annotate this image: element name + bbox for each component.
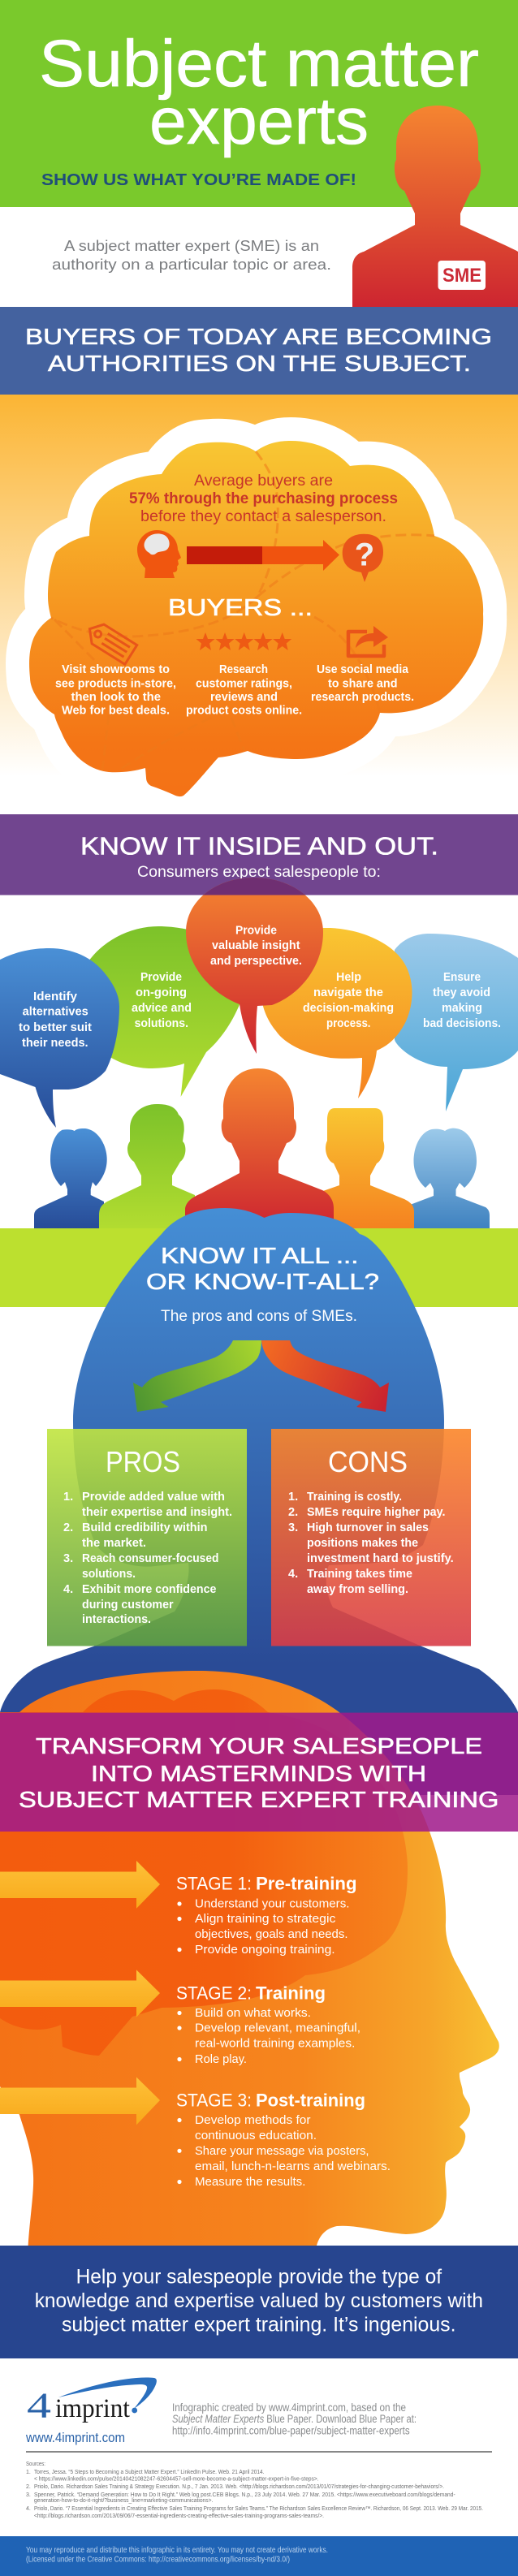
heading: know it all: The pros and cons of SMEs. [161,1308,357,1325]
heading: buyers: AUTHORITIES ON THE SUBJECT. [48,351,471,376]
text: 57 percent statement: Average buyers are [194,472,333,490]
text: stage 2: Develop relevant, meaningful, [195,2022,360,2035]
text: stage 1 [176,1874,357,1957]
list: pros: 4. [63,1583,73,1596]
heading: know it inside and out: Consumers expect salespeople to: [137,864,381,881]
text: stage 3: continuous education. [195,2129,317,2142]
text: sources: 4. [26,2506,31,2512]
text: stage 3: STAGE 3: [176,2090,252,2110]
speech bubble: navigate: Help [336,971,361,984]
text: sources: 1. [26,2470,31,2475]
list: pros [63,1491,232,1626]
text: stage 2: STAGE 2: [176,1983,252,2003]
speech bubble: insight: valuable insight [212,939,300,952]
speech bubble: alternatives: their needs. [22,1037,88,1050]
speech bubble: avoid bad decisions: making [442,1002,482,1015]
list: cons: Training takes time [307,1568,412,1581]
text: sources: 2. [26,2484,31,2490]
heading: transform your salespeople: INTO MASTERMINDS WITH [91,1761,426,1786]
arrow: stage 3 [0,2077,160,2125]
arrow: stage 1 [0,1861,160,1909]
text: showrooms: see products in-store, [55,677,176,690]
speech bubble: avoid bad decisions: Ensure [443,971,481,984]
list: pros: during customer [82,1599,174,1612]
panel: brain [29,441,483,796]
list: pros: Exhibit more confidence [82,1583,216,1596]
text: research: product costs online. [186,705,302,718]
text: stage 3: email, lunch-n-learns and webinars. [195,2160,391,2173]
text: showrooms: then look to the [71,691,161,704]
text: stage 1: objectives, goals and needs. [195,1928,347,1941]
text: stage 1: Provide ongoing training. [195,1944,335,1957]
speech bubble: advice: Provide [140,971,182,984]
text: stage 3: Develop methods for [195,2114,311,2127]
panel: pros [47,1429,247,1646]
text: credit: http://info.4imprint.com/blue-paper/subject-matter-experts [172,2424,410,2437]
heading: know it inside and out [0,814,518,895]
tagline: SHOW US WHAT YOU’RE MADE OF! [41,171,356,189]
title [39,27,479,158]
speech bubble: navigate: decision-making [303,1002,394,1015]
text: research: customer ratings, [196,677,292,690]
text: sources: Priolo, Dario. “7 Essential Ingredients in Creating Effective Sales Training Programs for Sales Teams.” The Richardson Sales Excellence Review™. Richardson, 06 Sept. 2013. Web. 29 Mar. 2015. [34,2506,483,2512]
text: credit: Infographic created by www.4imprint.com, based on the [172,2401,406,2414]
heading: buyers ellipsis: BUYERS ... [168,595,313,621]
text: sources [26,2462,483,2519]
speech bubble: alternatives: to better suit [19,1021,92,1034]
definition text: authority on a particular topic or area. [52,257,331,273]
list: pros: 2. [63,1521,73,1534]
panel: cons [271,1429,471,1646]
list: cons: High turnover in sales [307,1521,429,1534]
speech bubble: insight: Provide [235,925,277,938]
figures: consumers [34,1068,490,1228]
panel: pros: PROS [106,1445,180,1478]
text: credit: Subject Matter Experts Blue Paper. Download Blue Paper at: [172,2412,417,2425]
list: pros: 1. [63,1491,73,1504]
speech bubble: insight [186,878,323,1054]
text: stage 1: Understand your customers. [195,1898,349,1911]
text: 57 percent statement [129,472,398,525]
speech bubble: avoid bad decisions [395,934,518,1111]
footer: license [0,2536,518,2576]
footer: license: You may reproduce and distribute this infographic in its entirety. You may not create derivative works. [26,2545,328,2555]
band: lime [0,1228,518,1307]
text: stage 3: Post-training [256,2090,365,2110]
speech bubble: advice: advice and [132,1002,192,1015]
text: 57 percent statement: 57% through the purchasing process [129,490,398,507]
logo: 4imprint: imprint [55,2394,130,2423]
list: cons: 2. [288,1506,298,1519]
icon: share [348,626,388,656]
definition text [52,238,331,273]
list: cons [288,1491,454,1596]
icon: five stars [196,632,291,650]
text: social media: to share and [328,677,398,690]
text: sources: generation-how-to-do-it-right/?business_line=marketing-communications>. [34,2498,213,2504]
speech bubble: alternatives [0,948,119,1128]
icon: SME person [352,106,518,307]
text: showrooms: Web for best deals. [62,705,170,718]
heading: know it inside and out: KNOW IT INSIDE AND OUT. [80,831,438,861]
list: pros: interactions. [82,1613,151,1626]
text: research: reviews and [210,691,278,704]
footer: license: (Licensed under the Creative Commons: http://creativecommons.org/licenses/by-nd/3.0/) [26,2555,290,2565]
list: cons: SMEs require higher pay. [307,1506,445,1519]
arrow: purchasing progress [187,540,339,571]
text: stage 3: Share your message via posters, [195,2145,369,2158]
list: cons: 1. [288,1491,298,1504]
text: sources: 3. [26,2492,31,2498]
icon: head with brain [137,530,181,578]
title: experts [149,84,369,158]
panel: closing message: knowledge and expertise valued by customers with [35,2289,483,2312]
figure: large blue person [0,1208,518,1795]
speech bubble: advice: solutions. [135,1017,188,1030]
header panel [0,0,518,207]
list: pros: their expertise and insight. [82,1506,232,1519]
text: showrooms: Visit showrooms to [62,663,170,676]
logo: 4imprint: 4 [27,2385,51,2426]
icon: price tag [84,619,137,664]
arrow: to pros [133,1340,261,1412]
speech bubble: alternatives: Identify [33,990,77,1003]
list: pros: Reach consumer-focused [82,1552,218,1565]
text: research: Research [219,663,268,676]
text: sources: <http://blogs.richardson.com/2013/09/06/7-essential-ingredients-creating-effective-sales-training-programs-sales-teams/>. [34,2513,324,2519]
icon: SME person: SME [442,265,481,287]
heading: know it all: KNOW IT ALL ... [161,1243,359,1268]
text: sources: < https://www.linkedin.com/pulse/20140421082247-62604457-sell-more-become-a-subject-matter-expert-in-five-steps>. [34,2477,319,2483]
list: pros: 3. [63,1552,73,1565]
heading: buyers: BUYERS OF TODAY ARE BECOMING [25,324,492,349]
text: social media [311,663,414,704]
panel: closing message: Help your salespeople provide the type of [76,2266,442,2289]
text: social media: Use social media [317,663,409,676]
definition text: A subject matter expert (SME) is an [64,238,319,254]
link: website: www.4imprint.com [25,2430,125,2445]
speech bubble: navigate: navigate the [313,986,383,999]
list: cons: 4. [288,1568,298,1581]
speech bubble: avoid bad decisions: bad decisions. [423,1017,501,1030]
text: sources: Sources: [26,2462,45,2467]
heading: buyers [0,307,518,395]
text: stage 3: Measure the results. [195,2176,305,2189]
logo: 4imprint [27,2378,157,2426]
figure: brain in head [0,1689,408,2056]
speech bubble: advice [81,926,240,1097]
text: sources: Priolo, Dario. Richardson Sales Training & Strategy Execution. N.p., 7 Jan. 2013. Web. <http://blogs.richardson.com/2013/01/07/strategies-for-changing-customer-behaviors/>. [34,2484,444,2490]
panel: cons: CONS [328,1445,408,1478]
list: cons: away from selling. [307,1583,408,1596]
heading: transform your salespeople [0,1713,518,1832]
list: cons: investment hard to justify. [307,1552,454,1565]
text: stage 2: real-world training examples. [195,2038,355,2051]
arrow: stage 2 [0,1970,160,2017]
heading: transform your salespeople: TRANSFORM YOUR SALESPEOPLE [36,1733,482,1758]
text: social media: research products. [311,691,414,704]
text: sources: Torres, Jessa. “5 Steps to Becoming a Subject Matter Expert.” LinkedIn Pulse. Web. 21 April 2014. [34,2470,265,2475]
text: stage 1: STAGE 1: [176,1874,252,1894]
list: cons: Training is costly. [307,1491,402,1504]
panel: closing message [0,2246,518,2358]
text: credit [172,2401,417,2437]
text: sources: Spenner, Patrick. “Demand Generation: How to Do It Right.” Web log post.CEB Blogs. N.p., 23 July 2014. Web. 27 Mar. 2015. <https://www.executiveboard.com/blogs/demand- [34,2492,455,2498]
text: stage 2: Training [256,1983,326,2003]
speech bubble: avoid bad decisions: they avoid [433,986,490,999]
text: stage 2 [176,1983,360,2066]
text: stage 1: Align training to strategic [195,1913,335,1926]
speech bubble: advice: on-going [136,986,187,999]
figure: orange head [0,1671,499,2246]
list: pros: the market. [82,1537,146,1550]
text: stage 1: Pre-training [256,1874,357,1894]
heading: know it all: OR KNOW-IT-ALL? [146,1269,379,1294]
arrow: to cons [261,1340,389,1412]
text: stage 3 [176,2090,391,2189]
list: pros: solutions. [82,1568,136,1581]
text: showrooms [55,663,176,718]
speech bubble: navigate [262,928,412,1098]
panel: closing message: subject matter expert training. It’s ingenious. [62,2314,456,2337]
icon: question bubble [343,534,383,582]
heading: know it all [146,1243,379,1325]
speech bubble: insight: and perspective. [210,955,302,968]
text: stage 2: Build on what works. [195,2007,311,2020]
list: pros: Build credibility within [82,1521,208,1534]
speech bubble: alternatives: alternatives [23,1006,88,1019]
text: research [186,663,302,718]
text: stage 2: Role play. [195,2053,247,2066]
heading: transform your salespeople: SUBJECT MATTER EXPERT TRAINING [19,1787,499,1812]
icon: question bubble: ? [355,537,374,573]
list: cons: positions makes the [307,1537,418,1550]
speech bubble: navigate: process. [326,1017,370,1030]
panel: brain background [0,395,518,776]
list: cons: 3. [288,1521,298,1534]
list: pros: Provide added value with [82,1491,225,1504]
text: 57 percent statement: before they contact a salesperson. [140,508,386,525]
title: Subject matter [39,27,479,101]
